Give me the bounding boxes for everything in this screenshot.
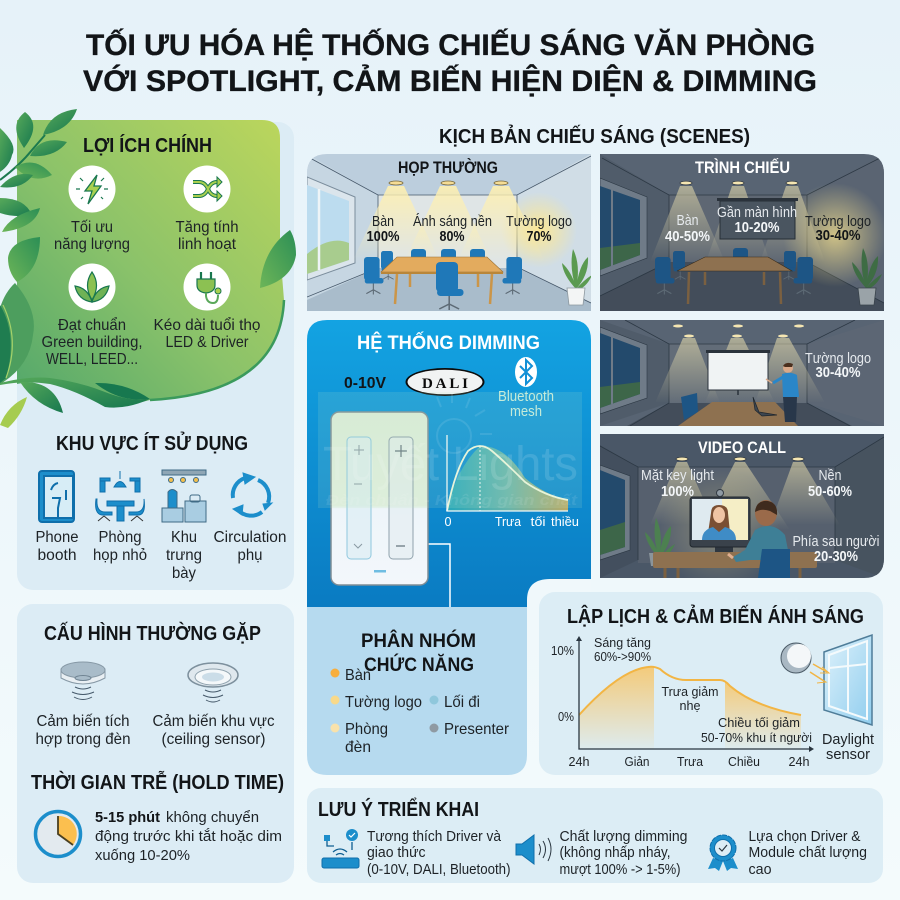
text: hold time: động trước khi tắt hoặc dim [95, 828, 282, 845]
labels: area types: Phòng [98, 529, 142, 546]
labels: area types: Khu [171, 529, 197, 546]
chart: daily schedule: 24h [568, 754, 590, 769]
title [83, 28, 817, 98]
chart: daily schedule: Trưa [677, 754, 704, 769]
labels: benefits: Green building, [42, 334, 142, 351]
panel: scene presenter [600, 320, 884, 426]
text: driver selection: Module chất lượng [748, 844, 867, 861]
chart: daily schedule: Trưa giảm [662, 684, 718, 699]
logo: DALI [406, 368, 484, 396]
labels: area types: bày [172, 565, 196, 582]
chart: daily schedule: Sáng tăng [594, 635, 651, 650]
labels: benefits [42, 219, 261, 368]
icon: bluetooth [515, 357, 537, 387]
heading: phan nhom chuc nang: PHÂN NHÓM [361, 630, 476, 652]
labels: area types: booth [38, 547, 76, 564]
chart: daily schedule: 60%->90% [594, 649, 651, 664]
text: hold time: 5-15 phút [95, 809, 160, 826]
scene labels: Tường logo [506, 214, 572, 230]
text: driver compatibility: (0-10V, DALI, Bluetooth) [367, 861, 510, 878]
legend: groups: Phòng [345, 721, 388, 738]
chart: daily schedule: 0% [558, 709, 574, 724]
scene labels: Mặt key light [641, 468, 714, 484]
chart: daily schedule: Chiều [728, 754, 760, 769]
chart: dimming curve: tối [530, 514, 546, 529]
scene labels: 20-30% [814, 549, 858, 565]
labels: area types: họp nhỏ [93, 547, 147, 564]
panel: scene trinh chieu [600, 154, 887, 311]
icon: energy [68, 166, 116, 212]
title: TỐI ƯU HÓA HỆ THỐNG CHIẾU SÁNG VĂN PHÒNG [86, 28, 815, 62]
icon: display area [162, 470, 206, 522]
title: VỚI SPOTLIGHT, CẢM BIẾN HIỆN DIỆN & DIMMING [83, 64, 817, 98]
connector line [428, 544, 450, 607]
labels: sensor types: hợp trong đèn [36, 731, 130, 748]
heading: loi ich chinh: LỢI ÍCH CHÍNH [83, 134, 212, 157]
panel: phan nhom chuc nang [307, 607, 527, 775]
scene labels: 30-40% [816, 365, 861, 381]
heading: thoi gian tre: THỜI GIAN TRỄ (HOLD TIME) [31, 770, 284, 794]
scene labels: Bàn [676, 213, 698, 229]
decorative leaves [0, 109, 296, 428]
legend: groups: Presenter [444, 721, 510, 738]
heading: khu vuc it su dung: KHU VỰC ÍT SỬ DỤNG [56, 431, 248, 455]
labels: sensor types: Cảm biến tích [36, 713, 130, 730]
scene title: HỌP THƯỜNG [398, 158, 498, 177]
panel: scene hop thuong [307, 154, 592, 311]
text: dimming quality [560, 828, 688, 878]
text: driver selection: Lựa chọn Driver & [748, 828, 860, 845]
scene labels: 30-40% [816, 228, 861, 244]
scene labels: Gần màn hình [717, 205, 797, 221]
chart: daily schedule: Chiều tối giảm [718, 715, 800, 730]
legend: groups [330, 667, 510, 756]
chart: daily schedule [551, 635, 814, 769]
labels: area types: Phone [36, 529, 78, 546]
chart: dimming curve: 0 [444, 514, 452, 529]
scene labels: Tường logo [805, 351, 871, 367]
watermark [318, 392, 582, 509]
heading: phan nhom chuc nang [361, 630, 476, 676]
icon: ceiling sensor [188, 663, 238, 702]
icon: flexibility [184, 166, 230, 212]
legend: groups: Tường logo [345, 694, 422, 711]
label: bluetooth mesh: mesh [510, 403, 542, 420]
labels: benefits: Đạt chuẩn [58, 316, 126, 334]
chart: daily schedule: nhẹ [680, 698, 700, 713]
labels: area types: phụ [238, 547, 262, 564]
label: daylight sensor: sensor [826, 746, 870, 763]
heading: luu y trien khai: LƯU Ý TRIỂN KHAI [318, 797, 479, 821]
text: hold time: xuống 10-20% [95, 847, 190, 864]
icon: integrated sensor [61, 662, 105, 700]
legend: groups: đèn [345, 739, 371, 756]
chart: dimming curve: thiều [551, 514, 579, 529]
scene labels: 40-50% [665, 229, 710, 245]
icon: phone booth [39, 471, 74, 522]
text: hold time: không chuyển [166, 809, 259, 826]
watermark: Tuyết Lights [323, 438, 578, 491]
labels: benefits: Tăng tính [176, 219, 238, 236]
text: driver compatibility [367, 828, 510, 878]
labels: benefits: Tối ưu [71, 219, 113, 236]
panel: lap lich va cam bien anh sang [527, 579, 883, 775]
chart: daily schedule: 24h [788, 754, 810, 769]
label: daylight sensor: Daylight [822, 731, 875, 748]
panel: loi ich chinh [17, 120, 284, 404]
legend: groups: Bàn [345, 667, 371, 684]
illustration: dimmer switch [331, 412, 428, 585]
scene labels: 100% [661, 484, 694, 500]
text: dimming quality: (không nhấp nháy, [560, 844, 670, 861]
label: bluetooth mesh [498, 388, 554, 420]
icon: green leaves [68, 264, 116, 310]
label: daylight sensor [822, 731, 875, 763]
heading: kich ban chieu sang: KỊCH BẢN CHIẾU SÁNG (SCENES) [439, 125, 750, 148]
scene labels: 10-20% [734, 220, 780, 236]
icon: circulation arrows [233, 473, 272, 516]
labels: benefits: WELL, LEED... [46, 351, 138, 368]
labels: sensor types: (ceiling sensor) [162, 731, 266, 748]
icon: clock [36, 812, 80, 856]
labels: sensor types: Cảm biến khu vực [152, 713, 275, 730]
panel: left column background with khu vuc it su dung [17, 122, 294, 590]
icon: quality badge [708, 835, 738, 871]
scene labels: 80% [440, 229, 465, 245]
panel: luu y trien khai [307, 788, 883, 883]
scene labels [366, 213, 572, 245]
panel: scene video call [600, 434, 884, 590]
chart: dimming curve [444, 435, 579, 529]
text: driver selection [748, 828, 867, 878]
legend: groups: Lối đi [444, 694, 480, 711]
labels: sensor types [36, 713, 275, 748]
text: driver compatibility: giao thức [367, 844, 426, 861]
scene labels: Bàn [372, 214, 394, 230]
panel: cau hinh thuong gap [17, 604, 294, 883]
labels: benefits: linh hoạt [178, 236, 237, 253]
labels: area types: trưng [166, 547, 202, 564]
scene labels [805, 351, 871, 381]
heading: lap lich: LẬP LỊCH & CẢM BIẾN ÁNH SÁNG [567, 604, 864, 628]
icon: speaker [516, 835, 551, 864]
text: dimming quality: mượt 100% -> 1-5%) [560, 861, 680, 878]
scene labels: 70% [526, 229, 552, 245]
scene labels [665, 205, 871, 245]
label: bluetooth mesh: Bluetooth [498, 388, 554, 405]
logo: DALI: DALI [422, 376, 468, 392]
heading: phan nhom chuc nang: CHỨC NĂNG [364, 654, 474, 676]
text: driver selection: cao [748, 861, 772, 878]
labels: benefits: năng lượng [54, 236, 130, 253]
labels: area types: Circulation [214, 529, 286, 546]
watermark: Đèn chuẩn - Không gian chất [326, 492, 578, 509]
text: driver compatibility: Tương thích Driver và [367, 828, 502, 845]
chart: daily schedule: 10% [551, 643, 574, 658]
chart: daily schedule: 50-70% khu ít người [701, 730, 812, 745]
icon: small meeting room [96, 471, 144, 521]
labels: benefits: Kéo dài tuổi thọ [154, 316, 261, 334]
scene labels: Ánh sáng nền [413, 213, 492, 230]
scene labels: 100% [366, 229, 400, 245]
icon: driver router [322, 829, 359, 868]
icon: plug [184, 264, 230, 310]
labels: benefits: LED & Driver [166, 334, 249, 351]
scene labels: Tường logo [805, 214, 871, 230]
scene labels [641, 468, 880, 565]
scene labels: Nền [818, 468, 842, 484]
label: 0-10V: 0-10V [344, 375, 387, 392]
labels: area types [36, 529, 286, 582]
text: dimming quality: Chất lượng dimming [560, 828, 688, 845]
text: hold time [95, 809, 282, 864]
scene labels: Phía sau người [792, 534, 880, 550]
scene labels: 50-60% [808, 484, 852, 500]
heading: he thong dimming: HỆ THỐNG DIMMING [357, 332, 540, 354]
icon: daylight sensor and window [781, 635, 872, 725]
chart: dimming curve: Trưa [495, 514, 522, 529]
scene title: TRÌNH CHIẾU [695, 158, 790, 177]
chart: daily schedule: Giản [624, 754, 650, 769]
panel: he thong dimming [307, 320, 591, 607]
scene title: VIDEO CALL [698, 438, 786, 457]
heading: cau hinh thuong gap: CẤU HÌNH THƯỜNG GẶP [44, 621, 261, 645]
